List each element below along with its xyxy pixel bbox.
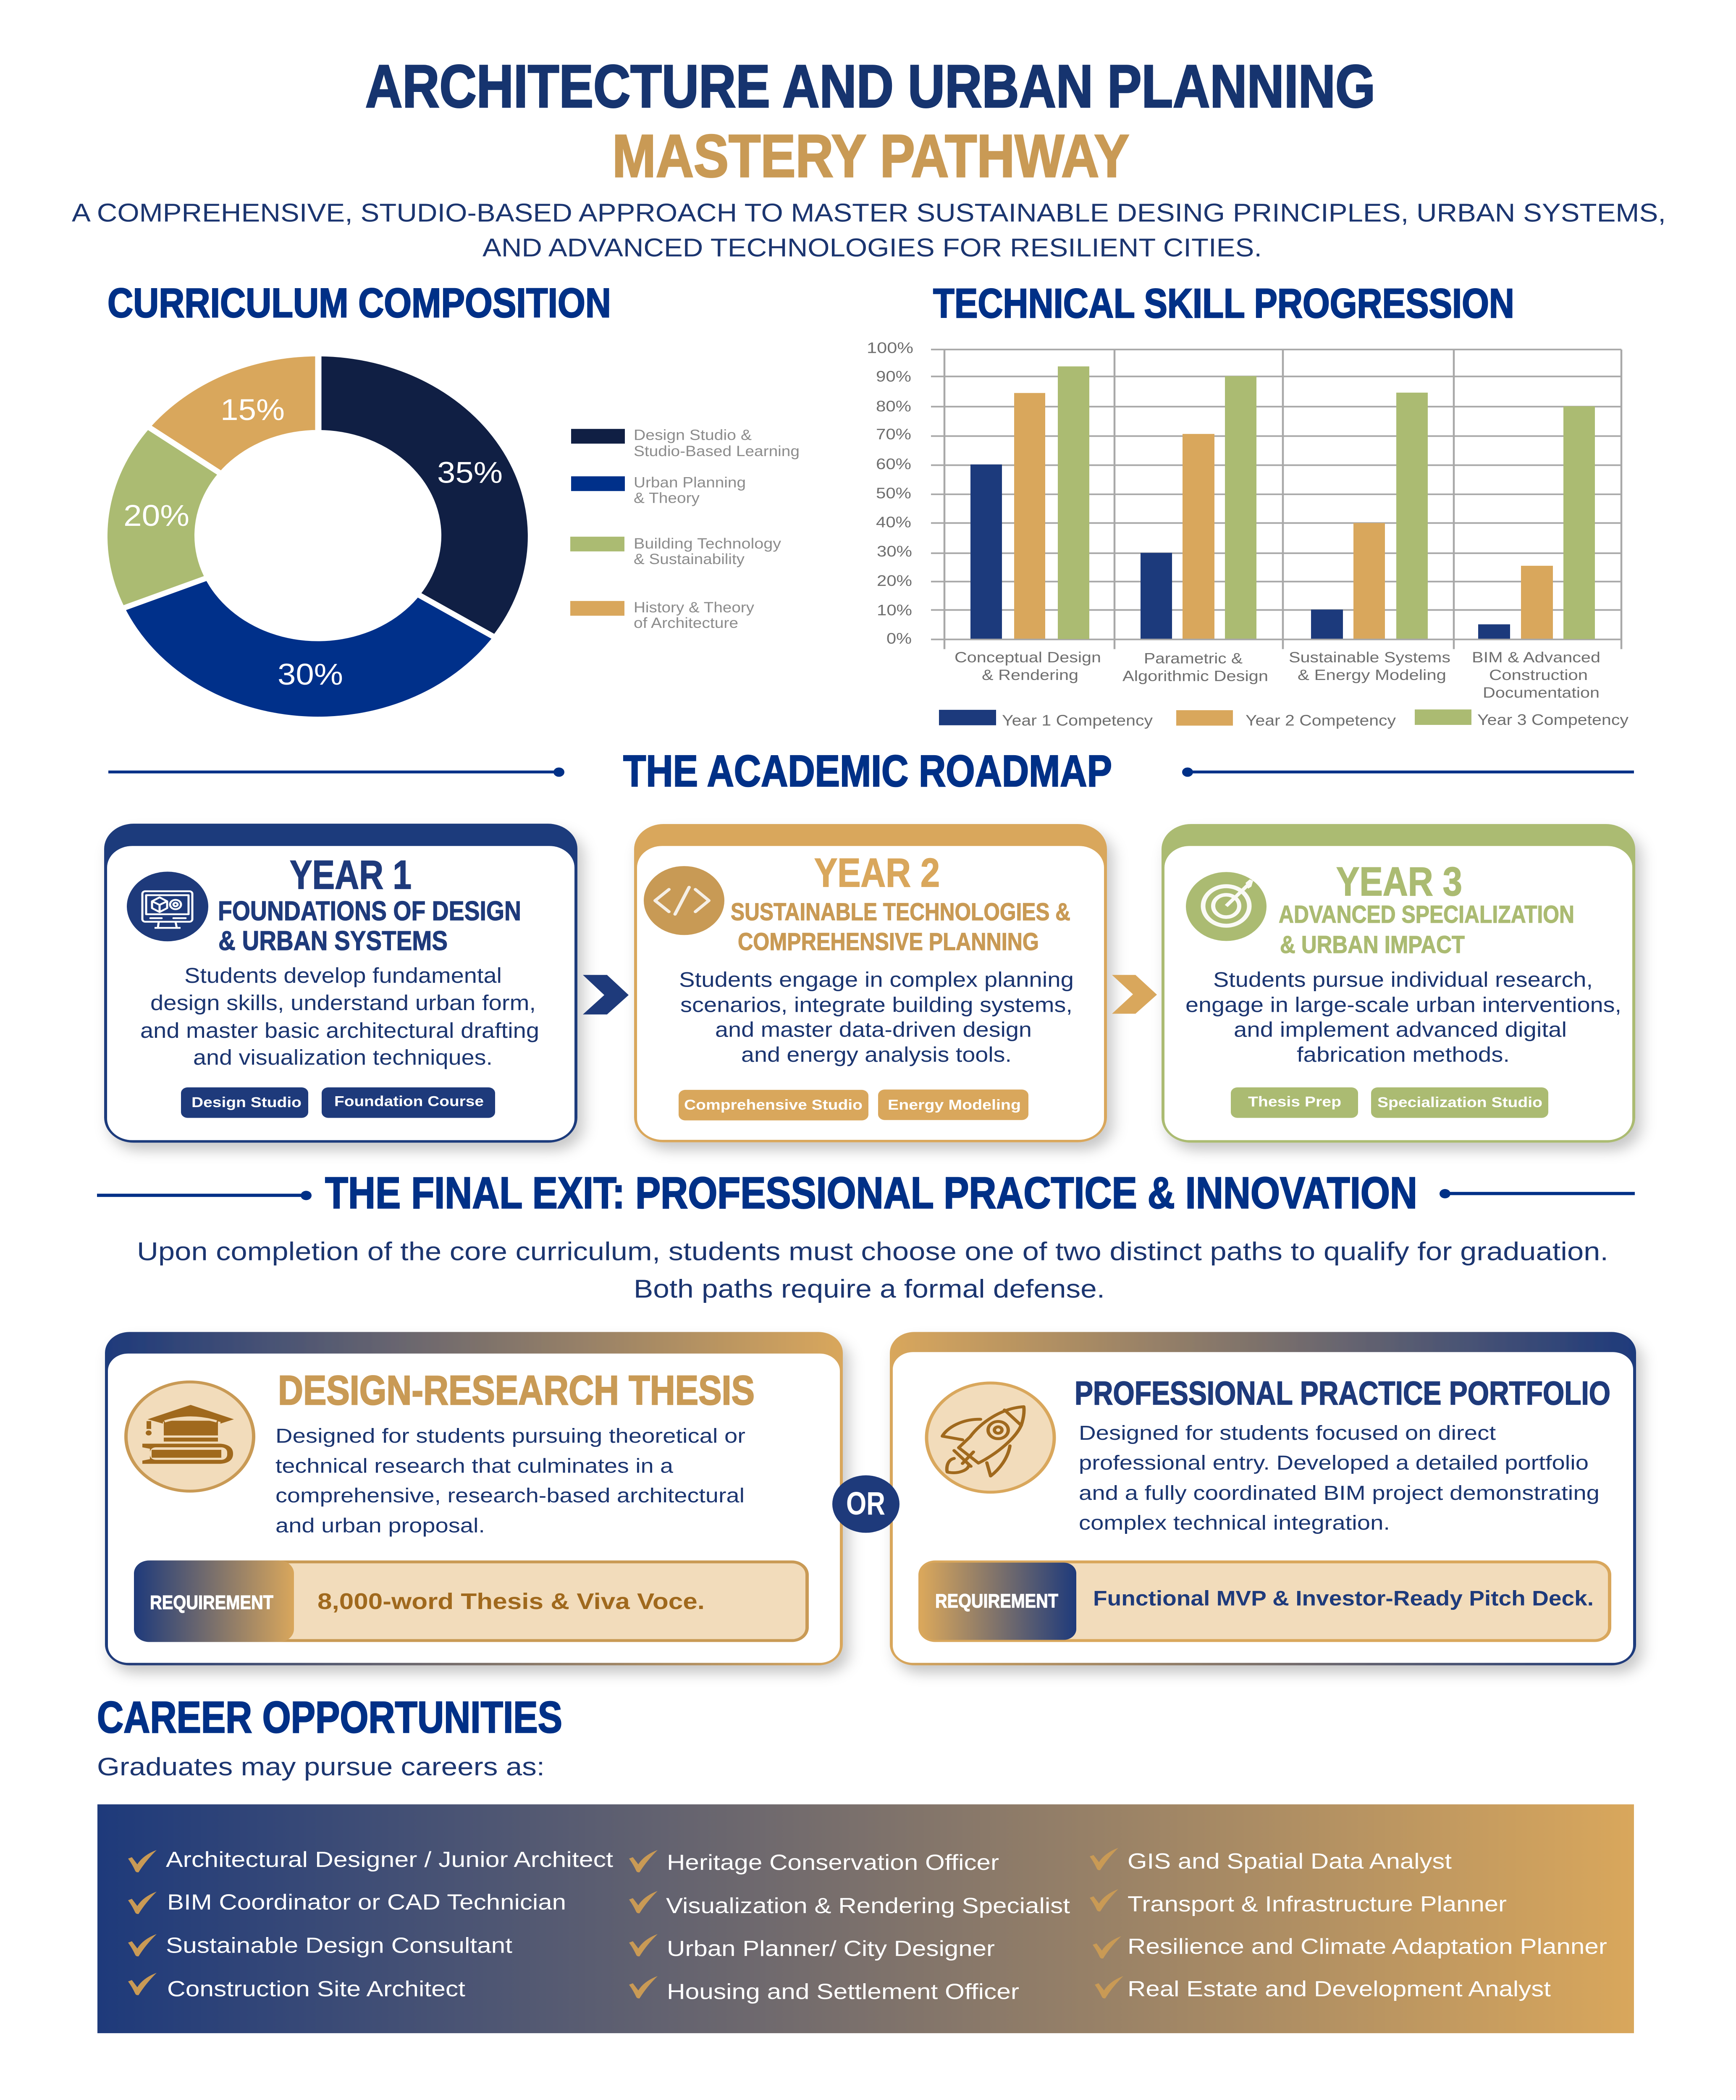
tag: thesis prep: Thesis Prep <box>1248 1093 1341 1110</box>
year 3 subtitle: ADVANCED SPECIALIZATION <box>1279 901 1574 928</box>
bar chart legend <box>939 709 1628 729</box>
intro text <box>72 199 1666 262</box>
donut legend: & Theory <box>634 490 700 507</box>
portfolio requirement <box>920 1562 1610 1641</box>
donut legend <box>570 427 800 631</box>
panel: year 2 <box>634 824 1107 1142</box>
year 2 description: and master data-driven design <box>715 1018 1032 1041</box>
tag: specialization studio <box>1371 1087 1548 1118</box>
final exit introduction: Both paths require a formal defense. <box>634 1274 1105 1303</box>
year 3 description <box>1185 968 1621 1066</box>
year 1 description: Students develop fundamental <box>184 963 502 987</box>
bars: conceptual design <box>970 366 1089 639</box>
career column 3: Transport & Infrastructure Planner <box>1128 1892 1507 1916</box>
career column 1: BIM Coordinator or CAD Technician <box>167 1890 566 1915</box>
portfolio description <box>1079 1422 1600 1534</box>
year 1 description: and master basic architectural drafting <box>140 1018 539 1042</box>
x axis labels: & Energy Modeling <box>1298 667 1446 683</box>
donut chart: 20% <box>123 499 189 533</box>
year 1 subtitle <box>218 895 521 956</box>
y axis labels: 50% <box>876 485 911 502</box>
year 2 description: and energy analysis tools. <box>741 1043 1012 1066</box>
x axis labels: BIM & Advanced <box>1472 649 1600 666</box>
intro text: AND ADVANCED TECHNOLOGIES FOR RESILIENT CITIES. <box>483 234 1262 262</box>
career column 2: Housing and Settlement Officer <box>667 1980 1019 2004</box>
portfolio requirement: Functional MVP & Investor-Ready Pitch Deck. <box>1093 1587 1594 1610</box>
career column 2: Visualization & Rendering Specialist <box>666 1894 1070 1918</box>
y axis labels: 20% <box>877 573 912 589</box>
panel: professional practice portfolio <box>890 1332 1636 1665</box>
donut legend: History & Theory <box>634 599 754 616</box>
year 2 heading: YEAR 2 <box>814 850 940 895</box>
tag: energy modeling <box>878 1089 1028 1120</box>
year 1 subtitle: & URBAN SYSTEMS <box>218 925 448 956</box>
thesis requirement: REQUIREMENT <box>150 1591 273 1613</box>
y axis labels: 100% <box>867 340 913 357</box>
x axis labels: Documentation <box>1483 685 1600 701</box>
segment 35% <box>318 356 528 637</box>
donut chart: 15% <box>220 393 285 426</box>
year 3 description: engage in large-scale urban interventions, <box>1185 993 1621 1016</box>
portfolio requirement: REQUIREMENT <box>935 1590 1058 1612</box>
x axis labels: Algorithmic Design <box>1122 668 1268 685</box>
tag: specialization studio: Specialization Studio <box>1377 1094 1542 1110</box>
badge: or <box>832 1475 899 1533</box>
bars: sustainable systems <box>1311 393 1428 639</box>
career column 3 <box>1128 1849 1607 2001</box>
portfolio description: Designed for students focused on direct <box>1079 1422 1496 1444</box>
year 3 subtitle <box>1279 901 1574 958</box>
segment 30% <box>124 536 493 717</box>
tag: design studio <box>181 1087 308 1118</box>
x axis labels: & Rendering <box>982 667 1078 683</box>
career column 3: Real Estate and Development Analyst <box>1128 1977 1551 2001</box>
x axis labels: Parametric & <box>1144 650 1243 667</box>
career column 1: Sustainable Design Consultant <box>166 1933 512 1958</box>
year 1 heading: YEAR 1 <box>290 853 412 898</box>
thesis description <box>275 1425 745 1537</box>
final exit introduction <box>137 1237 1608 1303</box>
badge: or: OR <box>846 1485 885 1521</box>
year 2 subtitle: SUSTAINABLE TECHNOLOGIES & <box>731 899 1070 926</box>
tag: design studio: Design Studio <box>191 1094 302 1110</box>
donut legend: Urban Planning <box>634 474 746 491</box>
tag: comprehensive studio: Comprehensive Studio <box>684 1097 863 1113</box>
thesis requirement <box>134 1560 807 1642</box>
panel: year 1 <box>104 824 577 1143</box>
year 2 subtitle <box>731 899 1070 956</box>
portfolio description: and a fully coordinated BIM project demonstrating <box>1079 1482 1600 1504</box>
thesis description: comprehensive, research-based architectural <box>275 1485 745 1507</box>
portfolio description: complex technical integration. <box>1079 1512 1390 1534</box>
tag: thesis prep <box>1231 1087 1358 1118</box>
thesis description: and urban proposal. <box>275 1515 485 1537</box>
year 3 description: fabrication methods. <box>1297 1043 1510 1066</box>
year 1 description: and visualization techniques. <box>193 1045 493 1069</box>
arrow: year 2 to year 3 <box>1112 975 1157 1014</box>
y axis labels: 60% <box>876 456 911 472</box>
tag: foundation course: Foundation Course <box>334 1093 484 1109</box>
year 1 description: design skills, understand urban form, <box>150 990 536 1015</box>
heading: career opportunities: CAREER OPPORTUNITIES <box>97 1693 562 1742</box>
year 3 description: and implement advanced digital <box>1234 1018 1567 1041</box>
y axis labels <box>867 340 913 647</box>
subtitle: mastery pathway: MASTERY PATHWAY <box>612 122 1129 190</box>
icon: rocket <box>926 1383 1054 1492</box>
y axis labels: 10% <box>877 602 912 619</box>
career column 1 <box>166 1848 613 2001</box>
thesis description: technical research that culminates in a <box>275 1455 673 1478</box>
x axis labels: Conceptual Design <box>955 649 1101 666</box>
tag: energy modeling: Energy Modeling <box>888 1097 1021 1113</box>
panel: year 3 <box>1162 824 1635 1143</box>
icon: graduation cap on book <box>126 1382 254 1491</box>
x axis labels: Construction <box>1489 667 1588 683</box>
year 1 subtitle: FOUNDATIONS OF DESIGN <box>218 895 521 926</box>
year 3 description: Students pursue individual research, <box>1213 968 1593 992</box>
segment 15% <box>150 356 318 536</box>
year 2 subtitle: COMPREHENSIVE PLANNING <box>738 929 1039 956</box>
year 3 subtitle: & URBAN IMPACT <box>1280 932 1465 958</box>
year 2 description: Students engage in complex planning <box>679 968 1074 992</box>
y axis labels: 40% <box>876 514 911 531</box>
y axis labels: 90% <box>876 368 911 385</box>
career column 2 <box>666 1851 1070 2004</box>
bars: parametric design <box>1141 376 1256 639</box>
career column 2: Heritage Conservation Officer <box>667 1851 999 1875</box>
portfolio description: professional entry. Developed a detailed portfolio <box>1079 1452 1589 1474</box>
panel: career list <box>97 1804 1634 2033</box>
tag: comprehensive studio <box>679 1090 868 1121</box>
bar chart legend: Year 1 Competency <box>1002 712 1153 729</box>
donut legend: of Architecture <box>634 615 738 631</box>
donut chart: 35% <box>437 455 503 489</box>
thesis description: Designed for students pursuing theoretical or <box>275 1425 745 1447</box>
year 2 description: scenarios, integrate building systems, <box>680 993 1073 1016</box>
heading: curriculum composition: CURRICULUM COMPOSITION <box>108 280 611 326</box>
thesis heading: DESIGN-RESEARCH THESIS <box>278 1367 755 1413</box>
bar chart legend: Year 3 Competency <box>1477 712 1628 728</box>
icon: target with arrow <box>1186 872 1267 941</box>
final exit introduction: Upon completion of the core curriculum, students must choose one of two distinct paths to qualify for graduation. <box>137 1237 1608 1266</box>
y axis labels: 80% <box>876 398 911 415</box>
tag: foundation course <box>322 1087 495 1118</box>
bar chart legend: Year 2 Competency <box>1246 712 1396 729</box>
x axis labels <box>955 649 1600 701</box>
y axis labels: 70% <box>876 426 911 443</box>
x axis labels: Sustainable Systems <box>1289 649 1450 666</box>
donut chart <box>108 352 528 717</box>
donut chart: 30% <box>278 657 343 691</box>
thesis requirement: 8,000-word Thesis & Viva Voce. <box>317 1589 705 1614</box>
career column 3: Resilience and Climate Adaptation Planner <box>1128 1935 1607 1959</box>
heading: technical skill progression: TECHNICAL SKILL PROGRESSION <box>933 280 1514 326</box>
panel: design-research thesis <box>105 1332 843 1665</box>
title: ARCHITECTURE AND URBAN PLANNING <box>365 52 1375 120</box>
section heading: the academic roadmap: THE ACADEMIC ROADMAP <box>623 747 1112 796</box>
donut legend: Studio-Based Learning <box>634 443 800 459</box>
arrow: year 1 to year 2 <box>583 975 629 1014</box>
donut legend: & Sustainability <box>634 551 745 567</box>
careers introduction: Graduates may pursue careers as: <box>97 1753 545 1781</box>
career column 1: Construction Site Architect <box>167 1977 465 2001</box>
segment 20% <box>108 428 318 607</box>
y axis labels: 0% <box>886 630 912 647</box>
bars: BIM documentation <box>1478 406 1595 639</box>
y axis labels: 30% <box>877 543 912 560</box>
year 2 description <box>679 968 1074 1066</box>
career column 2: Urban Planner/ City Designer <box>667 1937 995 1961</box>
bar chart <box>867 340 1621 701</box>
year 3 heading: YEAR 3 <box>1336 859 1462 904</box>
career column 1: Architectural Designer / Junior Architect <box>166 1848 613 1872</box>
section heading: the academic roadmap <box>108 747 1634 796</box>
intro text: A COMPREHENSIVE, STUDIO-BASED APPROACH TO MASTER SUSTAINABLE DESING PRINCIPLES, URBAN SYSTEMS, <box>72 199 1666 227</box>
icon: code brackets <box>644 866 724 935</box>
donut legend: Building Technology <box>634 536 781 552</box>
check icons <box>128 1848 1123 1998</box>
year 1 description <box>140 963 539 1069</box>
icon: computer with cube and gear <box>127 872 208 941</box>
donut legend: Design Studio & <box>634 427 752 444</box>
career column 3: GIS and Spatial Data Analyst <box>1128 1849 1452 1874</box>
